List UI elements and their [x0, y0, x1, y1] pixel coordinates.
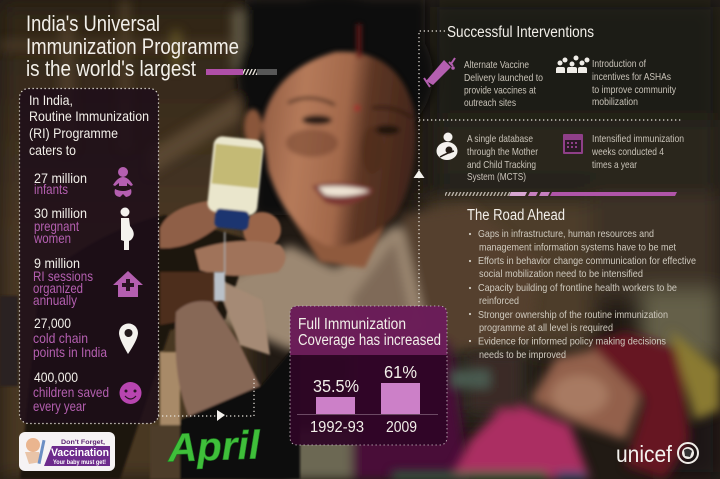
baby	[392, 330, 720, 479]
text: alternate vaccine delivery: Alternate Vaccine	[464, 59, 529, 71]
text: single database: and Child Tracking	[467, 159, 536, 171]
bullet list: programme at all level is required	[479, 322, 613, 334]
icon: health house	[113, 271, 143, 297]
stat: children saved	[33, 369, 109, 414]
bar chart: 35.5%	[313, 376, 359, 396]
vaccination logo: Your baby must get!	[53, 460, 106, 466]
icon: calendar	[563, 134, 583, 154]
panel heading: Full Immunization	[298, 316, 406, 333]
icon: baby	[113, 167, 133, 197]
stat: RI sessions: RI sessions	[33, 268, 93, 284]
stat: RI sessions	[33, 255, 93, 308]
bullet list	[469, 228, 696, 361]
text: single database	[467, 133, 538, 183]
text: intensified immunization: weeks conducted 4	[591, 146, 664, 158]
stat: pregnant women	[33, 205, 87, 246]
icon: map pin	[119, 324, 138, 354]
hands	[0, 200, 300, 479]
bullet list: reinforced	[479, 295, 519, 307]
shawl	[220, 225, 430, 350]
icon: syringe	[424, 58, 455, 87]
stat: infants: 27 million	[34, 170, 87, 186]
text: incentives for ASHAs: mobilization	[592, 96, 638, 108]
icon: pregnant woman	[120, 208, 134, 250]
panel intro text	[29, 92, 149, 158]
unicef logo: unicef	[616, 441, 673, 467]
panel: India RI programme	[20, 88, 158, 424]
stat: pregnant women: 30 million	[34, 205, 87, 221]
hair mass	[237, 0, 433, 155]
icon: mother and child	[436, 132, 458, 160]
stat: pregnant women: pregnant	[34, 218, 79, 234]
text: alternate vaccine delivery: outreach sites	[464, 97, 516, 109]
icon: smiling face	[120, 382, 142, 404]
bullet list: Gaps in infrastructure, human resources and	[478, 228, 654, 240]
text: intensified immunization	[591, 133, 684, 171]
stat: infants	[34, 170, 87, 197]
panel heading: Coverage has increased	[298, 332, 441, 349]
stat: RI sessions: organized	[33, 280, 83, 296]
bar chart: 1992-93	[310, 419, 364, 436]
icon: people group	[556, 56, 590, 73]
vaccination logo: Don't Forget,	[61, 439, 105, 446]
stat: infants: infants	[34, 181, 68, 197]
stat: children saved: 400,000	[34, 369, 78, 385]
bullet list: needs to be improved	[479, 349, 566, 361]
bullet list: Evidence for informed policy making decisions	[478, 336, 666, 348]
purple garment	[345, 340, 470, 479]
title: is the world's largest	[26, 56, 196, 81]
stat: cold chain: 27,000	[34, 315, 71, 331]
text: intensified immunization: times a year	[592, 159, 637, 171]
bar chart	[297, 362, 438, 436]
text: single database: A single database	[467, 133, 533, 145]
title: Immunization Programme	[26, 34, 239, 59]
text: alternate vaccine delivery	[464, 59, 543, 109]
stat: children saved: every year	[33, 398, 86, 414]
heading: Successful Interventions	[447, 24, 594, 41]
panel intro text: Routine Immunization	[29, 108, 149, 124]
bar chart: 61%	[384, 362, 417, 382]
panel: the road ahead	[467, 207, 696, 361]
text: incentives for ASHAs: incentives for ASHAs	[592, 71, 671, 83]
stat: pregnant women: women	[33, 230, 71, 246]
bullet list: social mobilization need to be intensified	[479, 268, 643, 280]
bullet list: Stronger ownership of the routine immunization	[478, 309, 668, 321]
text: incentives for ASHAs	[592, 58, 677, 108]
face	[244, 24, 415, 268]
text: intensified immunization: Intensified immunization	[592, 133, 684, 145]
stat: RI sessions: annually	[33, 292, 77, 308]
arrow: up triangle	[414, 170, 424, 178]
stat: RI sessions: 9 million	[34, 255, 80, 271]
bullet list: management information systems have to be met	[479, 242, 676, 254]
title	[26, 11, 239, 81]
stat: cold chain	[33, 315, 107, 360]
text: incentives for ASHAs: Introduction of	[592, 58, 646, 70]
bar chart: 2009	[386, 419, 417, 436]
vaccination logo	[19, 432, 115, 471]
heading: The Road Ahead	[467, 207, 565, 224]
panel intro text: In India,	[29, 92, 73, 108]
section divider bar	[445, 192, 677, 196]
April handwritten label: April	[166, 423, 262, 471]
text: single database: through the Mother	[467, 146, 538, 158]
panel intro text: (RI) Programme	[29, 125, 118, 141]
vaccine vial	[205, 136, 264, 301]
panel: full immunization coverage	[290, 306, 447, 445]
arrow: right triangle	[217, 410, 225, 421]
title accent bar	[206, 69, 277, 75]
stat: children saved: children saved	[33, 384, 109, 400]
panel intro text: caters to	[29, 142, 76, 158]
vaccination logo: Vaccination	[51, 447, 109, 459]
title: India's Universal	[26, 11, 160, 36]
text: alternate vaccine delivery: provide vaccines at	[464, 84, 536, 96]
text: incentives for ASHAs: to improve community	[592, 84, 677, 96]
stat: cold chain: points in India	[33, 344, 107, 360]
text: alternate vaccine delivery: Delivery launched to	[464, 72, 543, 84]
panel heading	[298, 316, 441, 349]
bullet list: Capacity building of frontline health workers to be	[478, 282, 677, 294]
panel: successful interventions	[424, 24, 684, 183]
stat: cold chain: cold chain	[33, 330, 88, 346]
dotted connector lines	[158, 31, 682, 416]
text: single database: System (MCTS)	[467, 171, 526, 183]
